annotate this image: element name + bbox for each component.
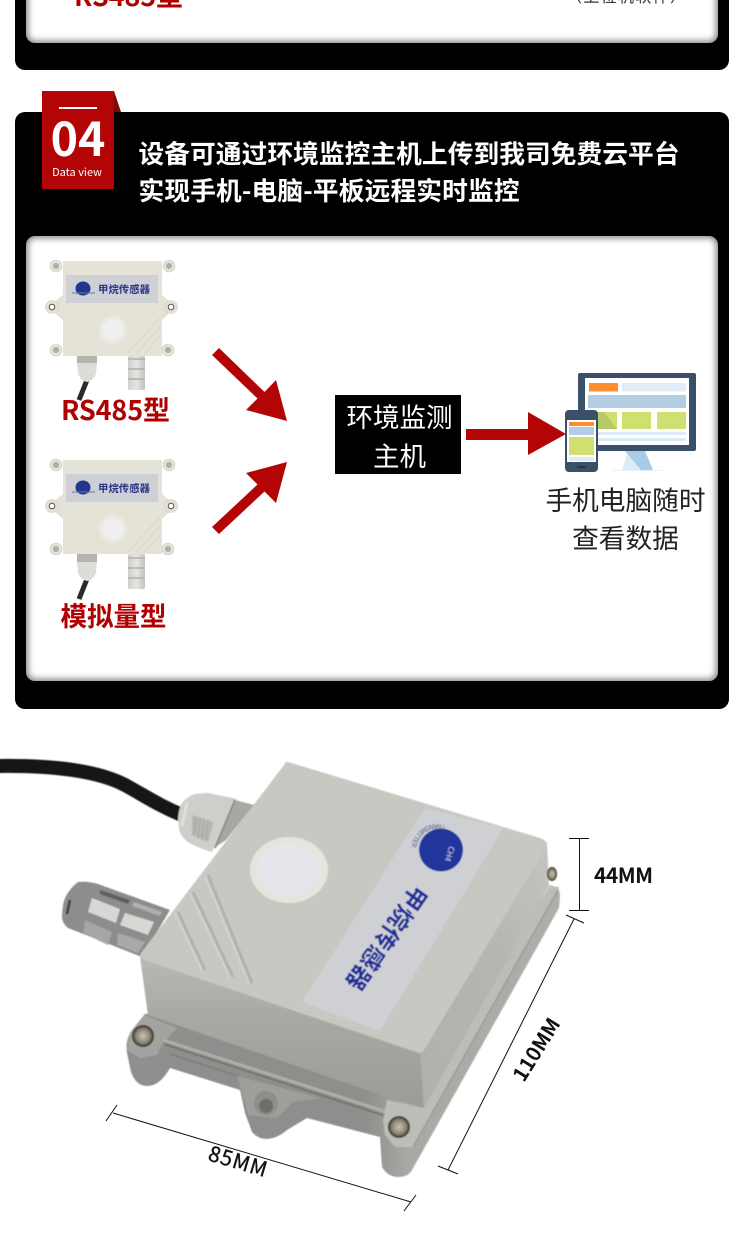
dimension: 44MM: 44MM (594, 860, 653, 890)
product photo: methane sensor enclosure (0, 758, 560, 1178)
heading (138, 134, 680, 208)
section tag: 04 Data view: Data view (52, 164, 102, 180)
left ear (127, 1015, 177, 1058)
enclosure top face (140, 762, 547, 1053)
dimension: 110MM: 110MM (504, 1011, 566, 1086)
box: environmental monitoring host: 环境监测 (346, 396, 452, 435)
humidity probe (62, 882, 170, 957)
product nameplate: TRANSMITTER (411, 824, 445, 848)
section tag: 04 Data view (42, 91, 121, 189)
middle ear (237, 1076, 320, 1118)
panel: previous section black card (15, 0, 729, 70)
arrow: RS485 to host (212, 348, 287, 421)
arrow: analog to host (212, 462, 287, 534)
icon: monitor and phone (565, 373, 696, 472)
flange ridge (163, 1040, 387, 1112)
enclosure front face (140, 957, 424, 1108)
dimension: 85MM: 85MM (205, 1138, 271, 1184)
product nameplate (302, 808, 502, 1030)
dimension: 110MM (438, 915, 584, 1174)
caption: phone and computer: 手机电脑随时 (545, 479, 706, 518)
heading: 设备可通过环境监控主机上传到我司免费云平台 (138, 134, 680, 171)
panel: previous section white card (26, 0, 718, 43)
arrow: host to devices (466, 412, 566, 455)
box: environmental monitoring host: 主机 (373, 435, 426, 474)
dimension: 85MM (106, 1105, 416, 1211)
product nameplate: 甲烷传感器 (339, 879, 437, 999)
sensor photo: RS485 type: 甲烷传感器 (98, 281, 151, 296)
heading: 实现手机-电脑-平板远程实时监控 (138, 171, 520, 208)
sensor photo: analog type (46, 459, 178, 599)
panel: section 04 white card (26, 236, 718, 681)
section tag: 04 Data view: 04 (51, 103, 105, 170)
mounting flange (127, 886, 560, 1177)
cable (0, 766, 182, 815)
light diffuser (250, 837, 328, 903)
cable gland (178, 793, 254, 852)
caption: phone and computer: 查看数据 (572, 517, 679, 556)
label: RS485型: RS485型 (61, 389, 170, 428)
screws (132, 867, 557, 1138)
right flange lip (383, 885, 559, 1147)
vent grooves (178, 875, 252, 983)
caption: phone and computer (545, 479, 706, 556)
dimension: 44MM (569, 838, 653, 910)
panel: section 04 black card (15, 112, 729, 709)
label: 模拟量型: 模拟量型 (60, 595, 166, 634)
box: environmental monitoring host (335, 395, 461, 474)
product nameplate: CH4 (442, 845, 457, 863)
enclosure side face (420, 842, 549, 1108)
sensor photo: analog type: 甲烷传感器 (98, 480, 151, 495)
sensor photo: RS485 type (46, 260, 178, 400)
